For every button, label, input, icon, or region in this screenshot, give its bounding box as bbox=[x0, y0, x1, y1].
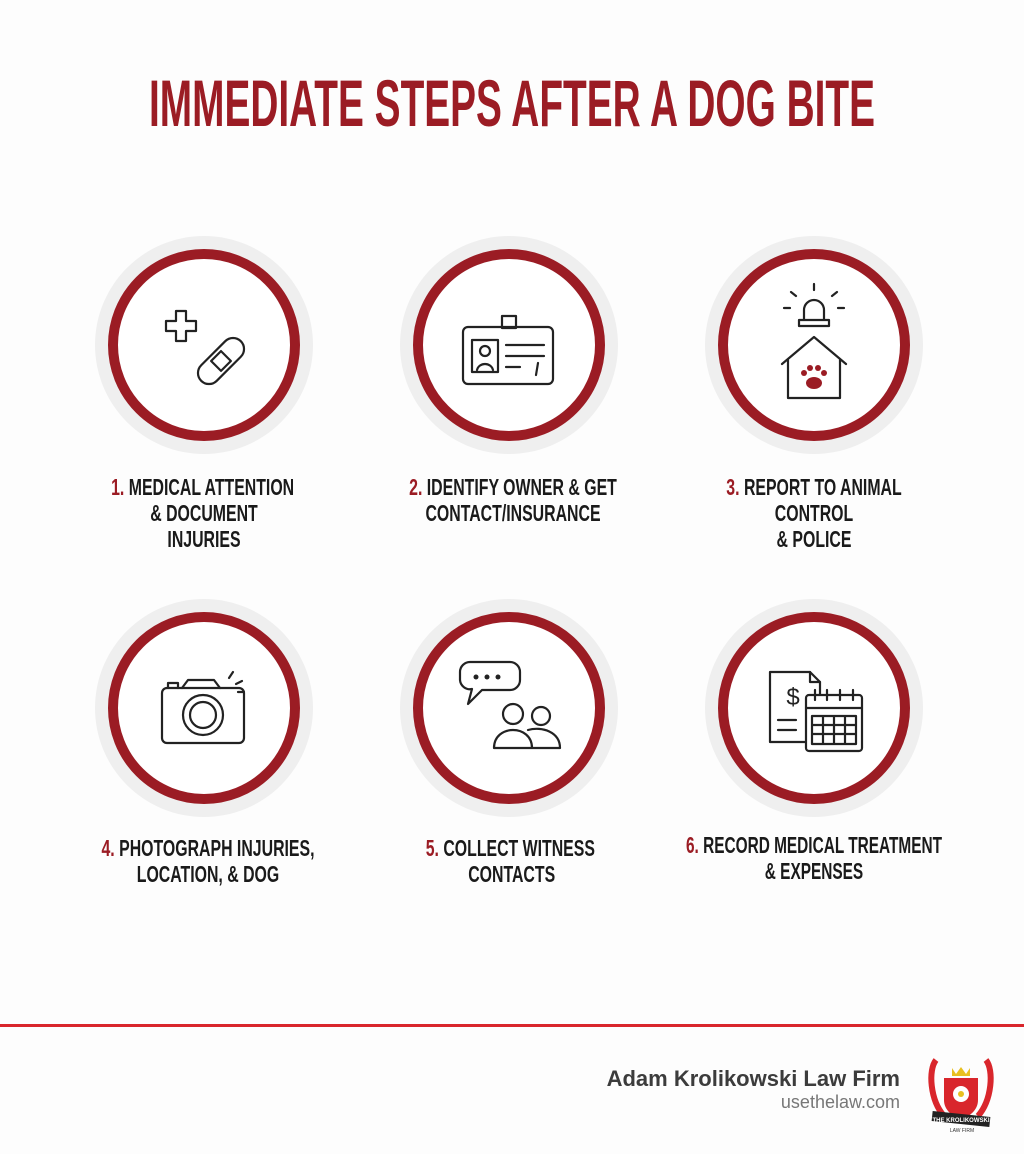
label 5: 5. COLLECT WITNESS bbox=[426, 836, 595, 862]
label 6: 6. RECORD MEDICAL TREATMENT bbox=[686, 833, 942, 859]
step 3 circle bbox=[705, 236, 923, 454]
label 3: CONTROL bbox=[775, 501, 853, 527]
logo: crest bbox=[931, 1060, 991, 1134]
label 3: 3. REPORT TO ANIMAL bbox=[726, 475, 902, 501]
logo: crest: LAW FIRM bbox=[950, 1128, 974, 1134]
footer firm name: usethelaw.com bbox=[781, 1092, 900, 1112]
icon: camera bbox=[162, 672, 244, 743]
icon: speech bubble and people bbox=[460, 662, 560, 748]
label 2: 2. IDENTIFY OWNER & GET bbox=[409, 475, 617, 501]
footer firm name: Adam Krolikowski Law Firm bbox=[607, 1066, 900, 1091]
footer divider bbox=[0, 1024, 1024, 1027]
logo: crest: THE KROLIKOWSKI bbox=[932, 1118, 990, 1124]
step 6 circle bbox=[705, 599, 923, 817]
label 6: & EXPENSES bbox=[765, 859, 863, 885]
label 2: CONTACT/INSURANCE bbox=[425, 501, 601, 527]
icon: id card bbox=[463, 316, 553, 384]
label 1: INJURIES bbox=[167, 527, 241, 553]
icon: bill and calendar bbox=[770, 672, 862, 751]
step 2 circle bbox=[400, 236, 618, 454]
icon: cross and bandage bbox=[166, 311, 249, 389]
step 5 circle bbox=[400, 599, 618, 817]
label 1: & DOCUMENT bbox=[150, 501, 258, 527]
icon: siren and dog house bbox=[782, 284, 846, 398]
step 1 circle bbox=[95, 236, 313, 454]
label 4: 4. PHOTOGRAPH INJURIES, bbox=[101, 836, 315, 862]
label 3: & POLICE bbox=[777, 527, 851, 553]
label 1: 1. MEDICAL ATTENTION bbox=[111, 475, 294, 501]
label 4: LOCATION, & DOG bbox=[137, 862, 279, 888]
label 5: CONTACTS bbox=[468, 862, 555, 888]
icon: bill and calendar: $ bbox=[786, 684, 800, 711]
step 4 circle bbox=[95, 599, 313, 817]
footer firm name bbox=[607, 1066, 900, 1112]
